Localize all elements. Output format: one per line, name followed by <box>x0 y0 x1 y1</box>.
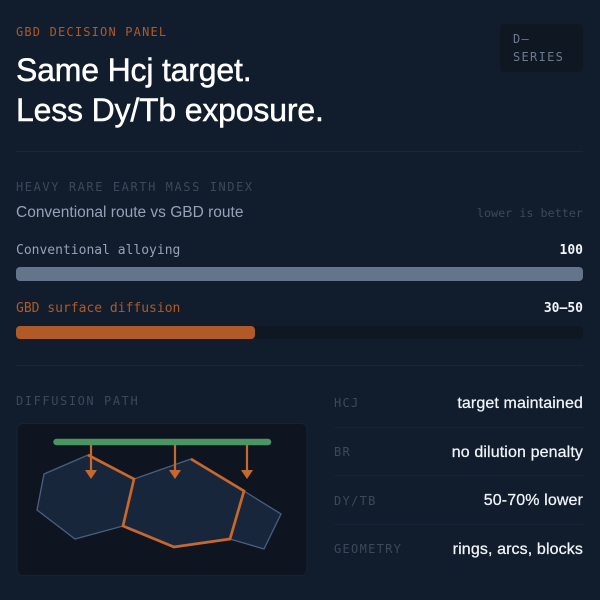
grains <box>37 455 281 549</box>
source layer <box>56 439 268 445</box>
title <box>16 52 324 128</box>
spec: Hcj value: target maintained <box>457 395 583 412</box>
spec: geometry label: GEOMETRY <box>334 542 402 556</box>
spec: geometry value: rings, arcs, blocks <box>453 541 583 558</box>
spec: Dy/Tb value: 50-70% lower <box>484 492 583 509</box>
badge: D-series <box>500 24 583 72</box>
bar fill <box>16 326 255 339</box>
eyebrow: GBD DECISION PANEL <box>16 25 167 39</box>
spec: Dy/Tb label: DY/TB <box>334 494 377 508</box>
bar label: GBD: GBD surface diffusion <box>16 301 180 316</box>
diagram: diffusion path <box>18 424 306 575</box>
badge text: D– <box>513 32 530 46</box>
title: Same Hcj target. <box>16 52 251 88</box>
arrows <box>85 445 253 479</box>
grain boundaries <box>88 455 244 547</box>
spec: Br value: no dilution penalty <box>452 444 583 461</box>
note: lower is better: lower is better <box>477 206 583 220</box>
spec: Br label: BR <box>334 445 351 459</box>
bar: GBD with track <box>16 326 583 339</box>
bar: conventional <box>16 267 583 281</box>
badge text <box>513 32 564 64</box>
section subtitle: Conventional route vs GBD route <box>16 204 243 221</box>
spec: Hcj label: HCJ <box>334 396 360 410</box>
section label: diffusion path: DIFFUSION PATH <box>16 394 139 408</box>
badge text: SERIES <box>513 50 564 64</box>
section label: mass index: HEAVY RARE EARTH MASS INDEX <box>16 180 254 194</box>
bar label: conventional: Conventional alloying <box>16 243 180 258</box>
bar value: 100: 100 <box>560 243 583 258</box>
title: Less Dy/Tb exposure. <box>16 92 324 128</box>
bar value: 30-50: 30–50 <box>544 301 583 316</box>
